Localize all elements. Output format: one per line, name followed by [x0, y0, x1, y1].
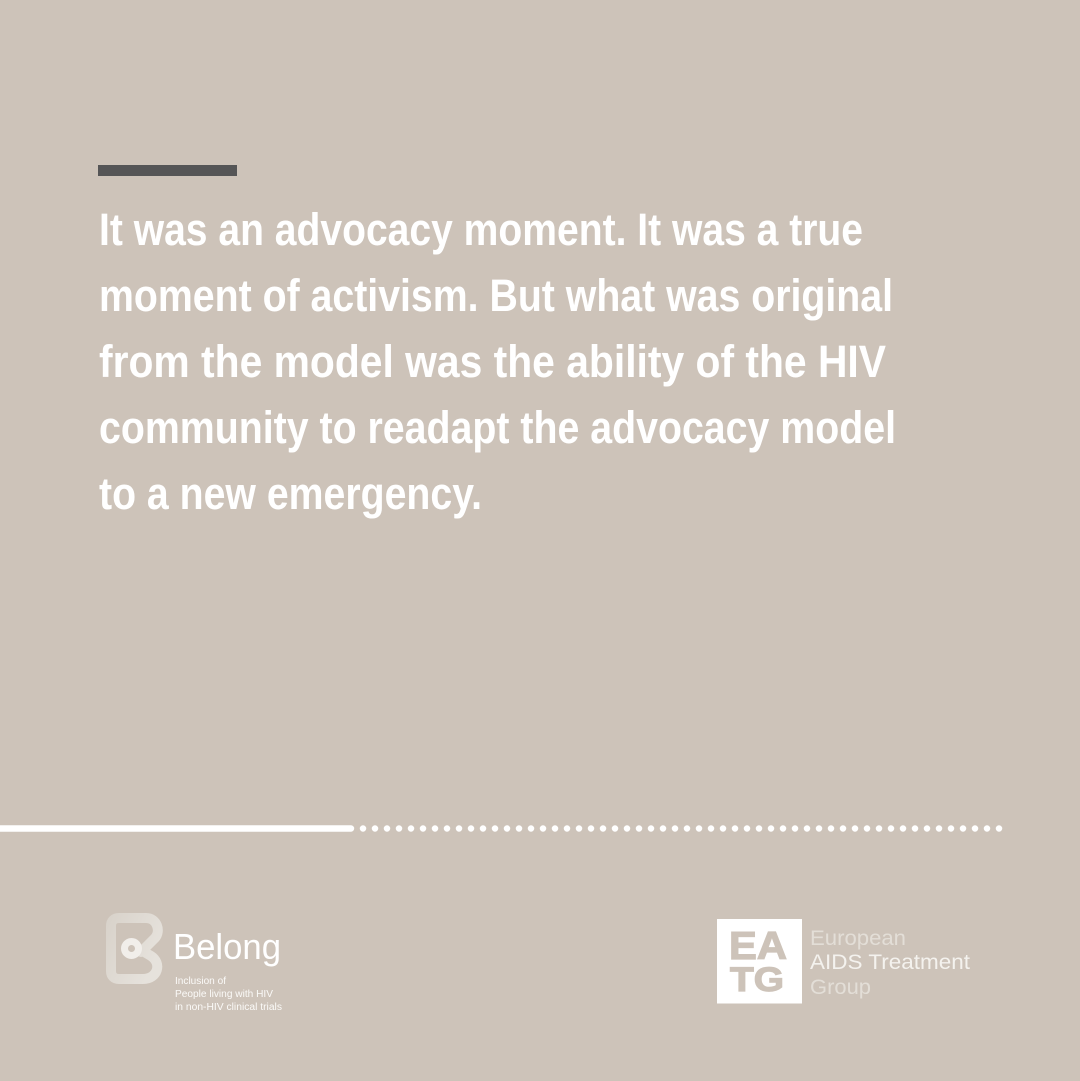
progress line: solid and dotted [0, 825, 1000, 832]
quote text: to a new emergency. [99, 468, 482, 519]
wordmark: Belong [173, 926, 281, 967]
square letters: EA [729, 925, 787, 968]
tagline [175, 976, 282, 1013]
organisation name: European [810, 927, 906, 950]
tagline: People living with HIV [175, 989, 273, 1000]
organisation name: Group [810, 976, 871, 999]
square letters [729, 925, 787, 999]
tagline: in non-HIV clinical trials [175, 1002, 282, 1013]
white square [717, 919, 802, 1004]
organisation name: AIDS Treatment [810, 951, 970, 974]
logo: Belong [111, 918, 282, 1013]
quote text: moment of activism. But what was original [99, 270, 893, 321]
accent bar [98, 165, 237, 176]
icon: Belong B mark [111, 918, 158, 979]
tagline: Inclusion of [175, 976, 226, 987]
quote text [99, 204, 896, 519]
square letters: TG [730, 961, 784, 999]
quote text: It was an advocacy moment. It was a true [99, 204, 863, 255]
quote text: from the model was the ability of the HIV [99, 336, 886, 387]
quote text: community to readapt the advocacy model [99, 402, 896, 453]
organisation name [810, 927, 970, 999]
logo: EATG [717, 919, 970, 1004]
